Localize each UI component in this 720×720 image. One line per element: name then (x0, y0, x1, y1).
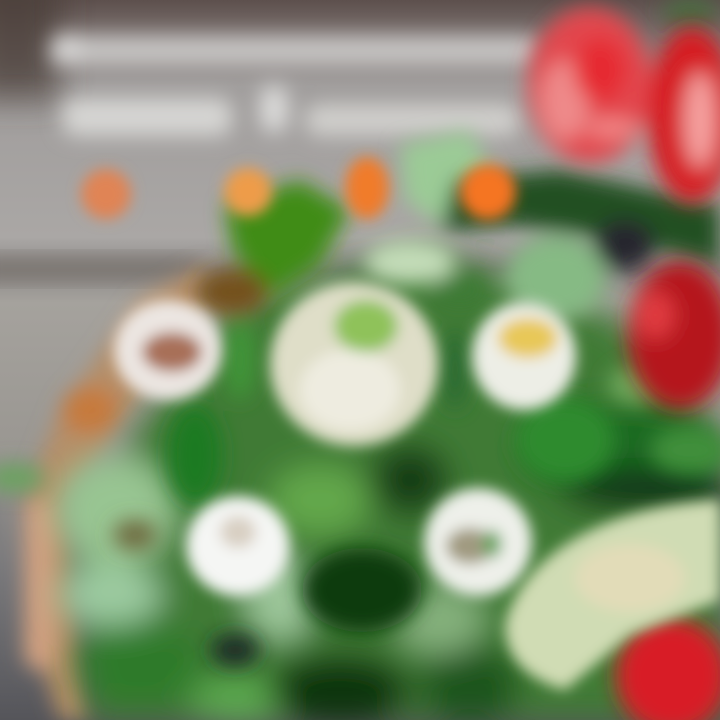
cucumber slice (505, 500, 720, 690)
title: blurred heading lines (50, 33, 540, 136)
egg slices and mozzarella (114, 282, 576, 596)
wooden board (24, 265, 210, 720)
salad greens base (55, 250, 720, 720)
tomatoes (528, 7, 720, 720)
orange dots: four icon markers (81, 157, 516, 220)
